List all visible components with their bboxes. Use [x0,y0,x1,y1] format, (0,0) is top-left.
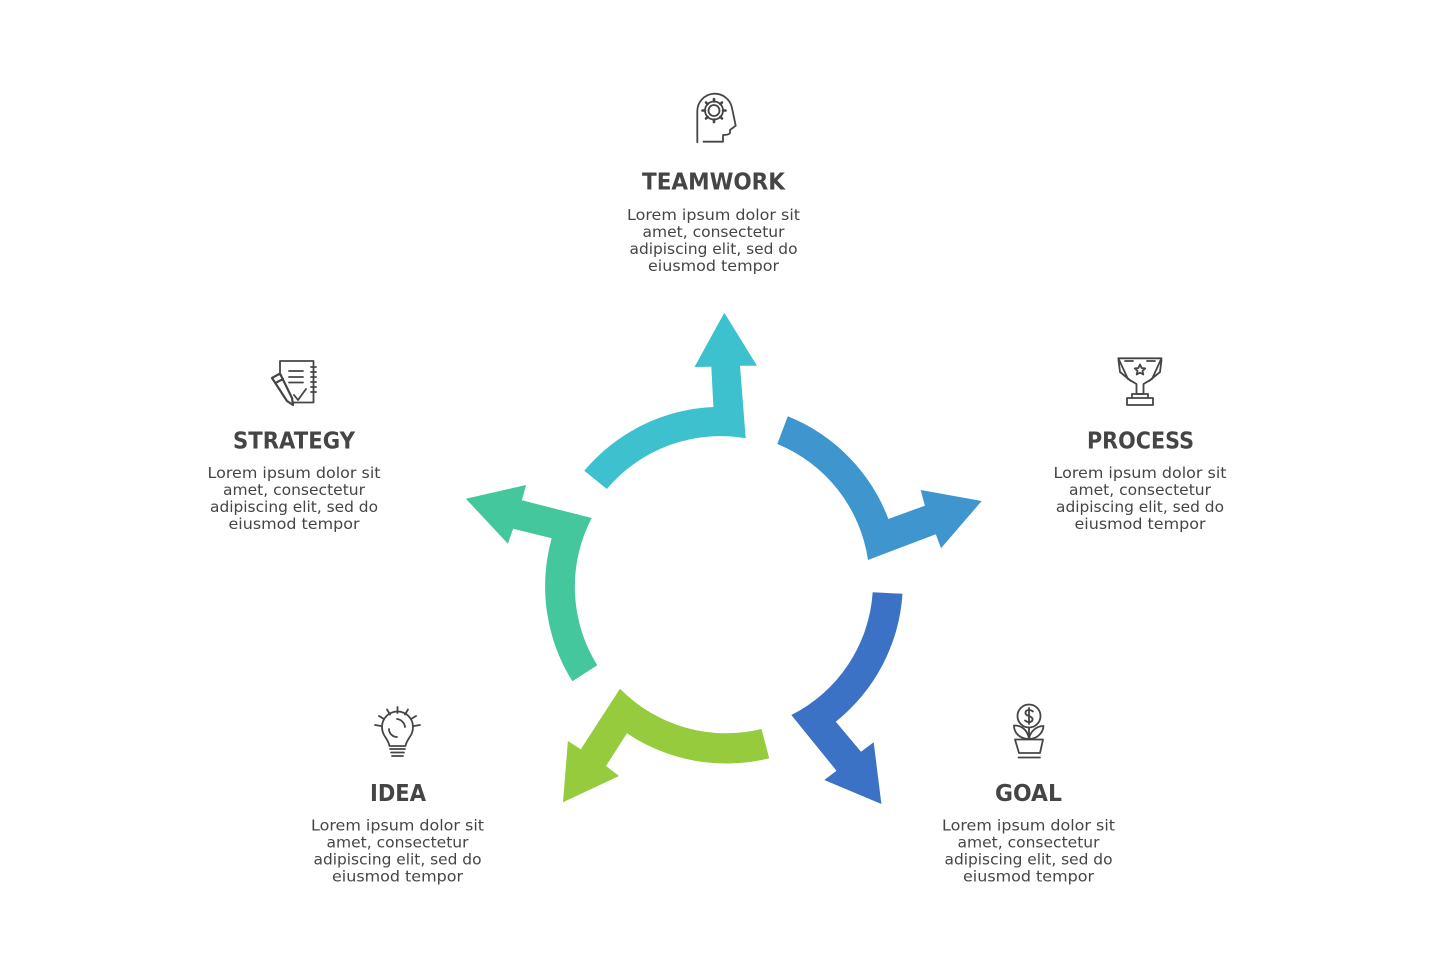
text block: strategy description: amet, consectetur [223,481,366,499]
text block: goal description: adipiscing elit, sed do [944,850,1112,868]
text block: process description: amet, consectetur [1069,481,1212,499]
text block: strategy description [208,464,381,533]
panel: teamwork [627,94,800,275]
text block: goal description: eiusmod tempor [963,868,1095,886]
text block: idea description: amet, consectetur [326,834,469,852]
text block: strategy description: Lorem ipsum dolor sit [208,464,381,482]
arrow: teamwork (teal) [584,313,757,489]
arrow: goal (dark blue) [791,592,902,804]
text block: process description: eiusmod tempor [1074,515,1206,533]
text block: teamwork description: adipiscing elit, sed do [630,240,798,258]
text block: goal description [942,816,1115,886]
icon: light bulb [375,707,420,756]
arrow: process (blue) [777,416,982,560]
icon: document and pen [272,361,316,405]
text block: process description [1054,464,1227,533]
icon: trophy [1118,358,1162,405]
text block: goal description: Lorem ipsum dolor sit [942,816,1115,834]
text block: strategy description: adipiscing elit, sed do [210,498,378,516]
text block: process description: Lorem ipsum dolor sit [1054,464,1227,482]
panel: process [1054,358,1227,533]
panel: idea [311,707,484,886]
text block: strategy description: eiusmod tempor [228,515,360,533]
icon: money plant [1014,704,1044,758]
text block: teamwork description: eiusmod tempor [648,257,780,275]
text block: goal description: amet, consectetur [958,834,1100,852]
circular arrow diagram [466,313,982,804]
arrow: idea (green) [563,689,769,802]
text block: teamwork description [627,206,800,275]
heading: teamwork: TEAMWORK [642,170,786,196]
text block: idea description: Lorem ipsum dolor sit [311,816,484,834]
text block: teamwork description: Lorem ipsum dolor sit [627,206,800,224]
arrow: strategy (sea green) [466,485,597,681]
panel: goal [942,704,1115,886]
icon: head with gear [697,94,736,142]
text block: teamwork description: amet, consectetur [642,223,785,241]
text block: idea description: eiusmod tempor [332,868,464,886]
heading: idea: IDEA [370,781,426,807]
heading: process: PROCESS [1087,428,1194,454]
heading: strategy: STRATEGY [233,428,355,454]
text block: process description: adipiscing elit, sed do [1056,498,1224,516]
heading: goal: GOAL [995,781,1062,807]
text block: idea description: adipiscing elit, sed do [314,850,482,868]
panel: strategy [208,361,381,533]
text block: idea description [311,816,484,886]
